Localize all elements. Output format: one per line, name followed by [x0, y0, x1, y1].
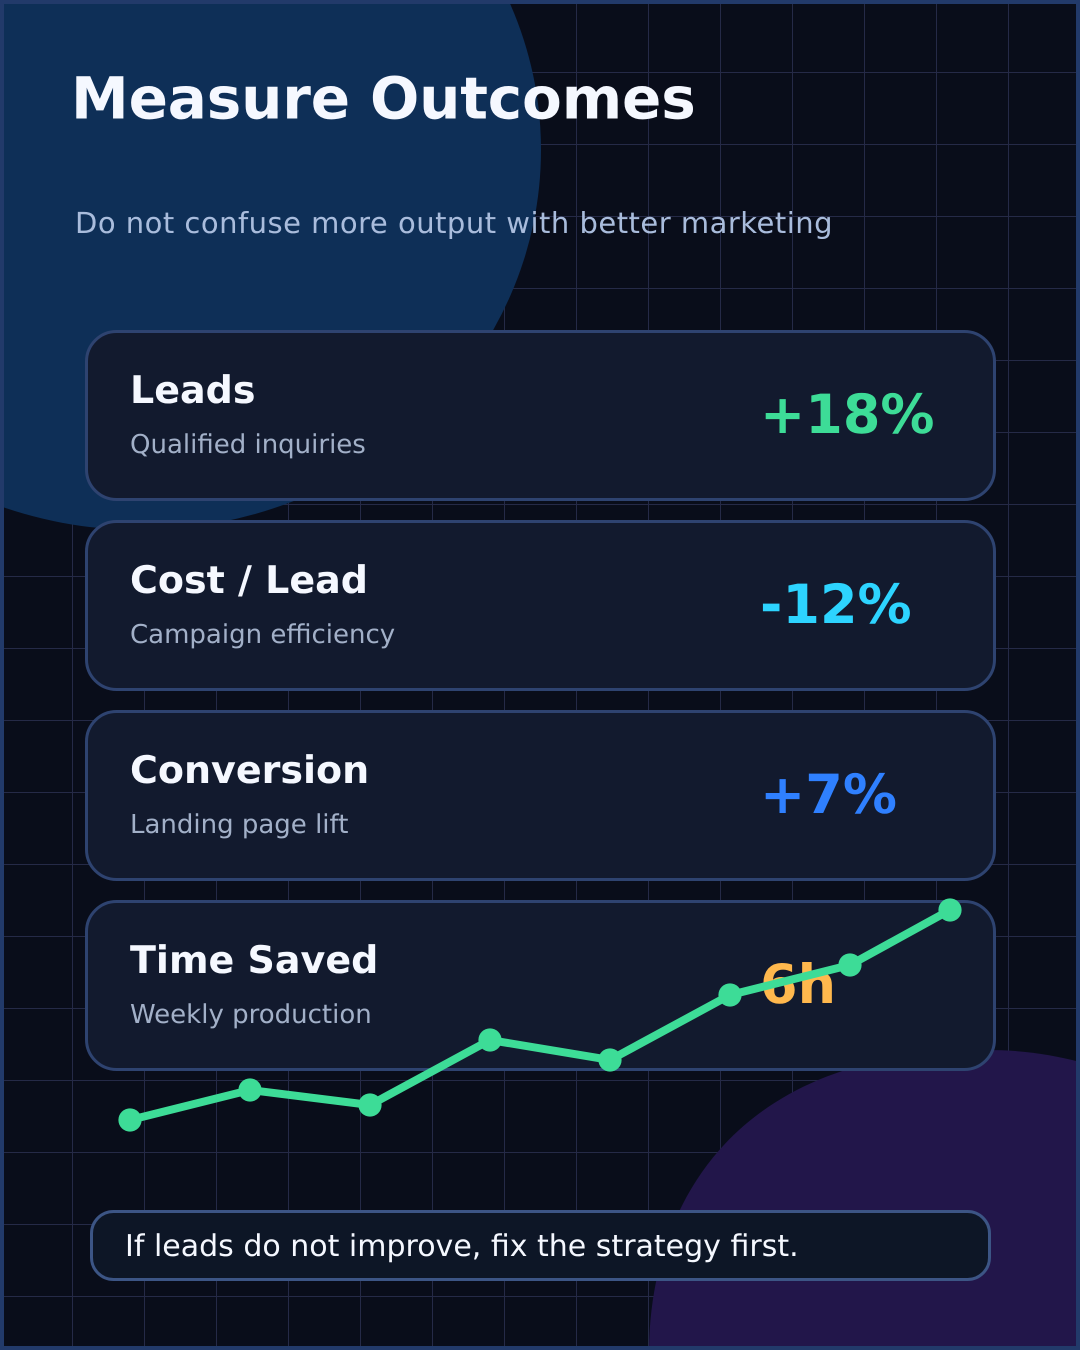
- panel: cost per lead: [86, 522, 994, 690]
- callout: If leads do not improve, fix the strategy first.: [125, 1229, 799, 1264]
- title: Measure Outcomes: [71, 64, 696, 132]
- panel: leads: [86, 332, 994, 500]
- panel: conversion: +7%: [760, 763, 897, 826]
- panel: leads: Qualified inquiries: [130, 430, 366, 460]
- panel: conversion: Conversion: [130, 748, 369, 792]
- background blob: blue: [0, 0, 541, 530]
- panel: conversion: [86, 712, 994, 880]
- subtitle: Do not confuse more output with better marketing: [75, 206, 833, 240]
- panel: time saved: 6h: [760, 953, 836, 1016]
- panel: leads: Leads: [130, 368, 255, 412]
- panel: cost per lead: -12%: [760, 573, 912, 636]
- panel: cost per lead: Campaign efficiency: [130, 620, 395, 650]
- line chart: [118, 898, 962, 1132]
- panel: leads: +18%: [760, 383, 934, 446]
- panel: time saved: Time Saved: [130, 938, 378, 982]
- panel: cost per lead: Cost / Lead: [130, 558, 368, 602]
- panel: time saved: Weekly production: [130, 1000, 372, 1030]
- panel: conversion: Landing page lift: [130, 810, 348, 840]
- callout: [92, 1212, 990, 1280]
- background blob: purple: [649, 1050, 1080, 1350]
- panel: time saved: [86, 902, 994, 1070]
